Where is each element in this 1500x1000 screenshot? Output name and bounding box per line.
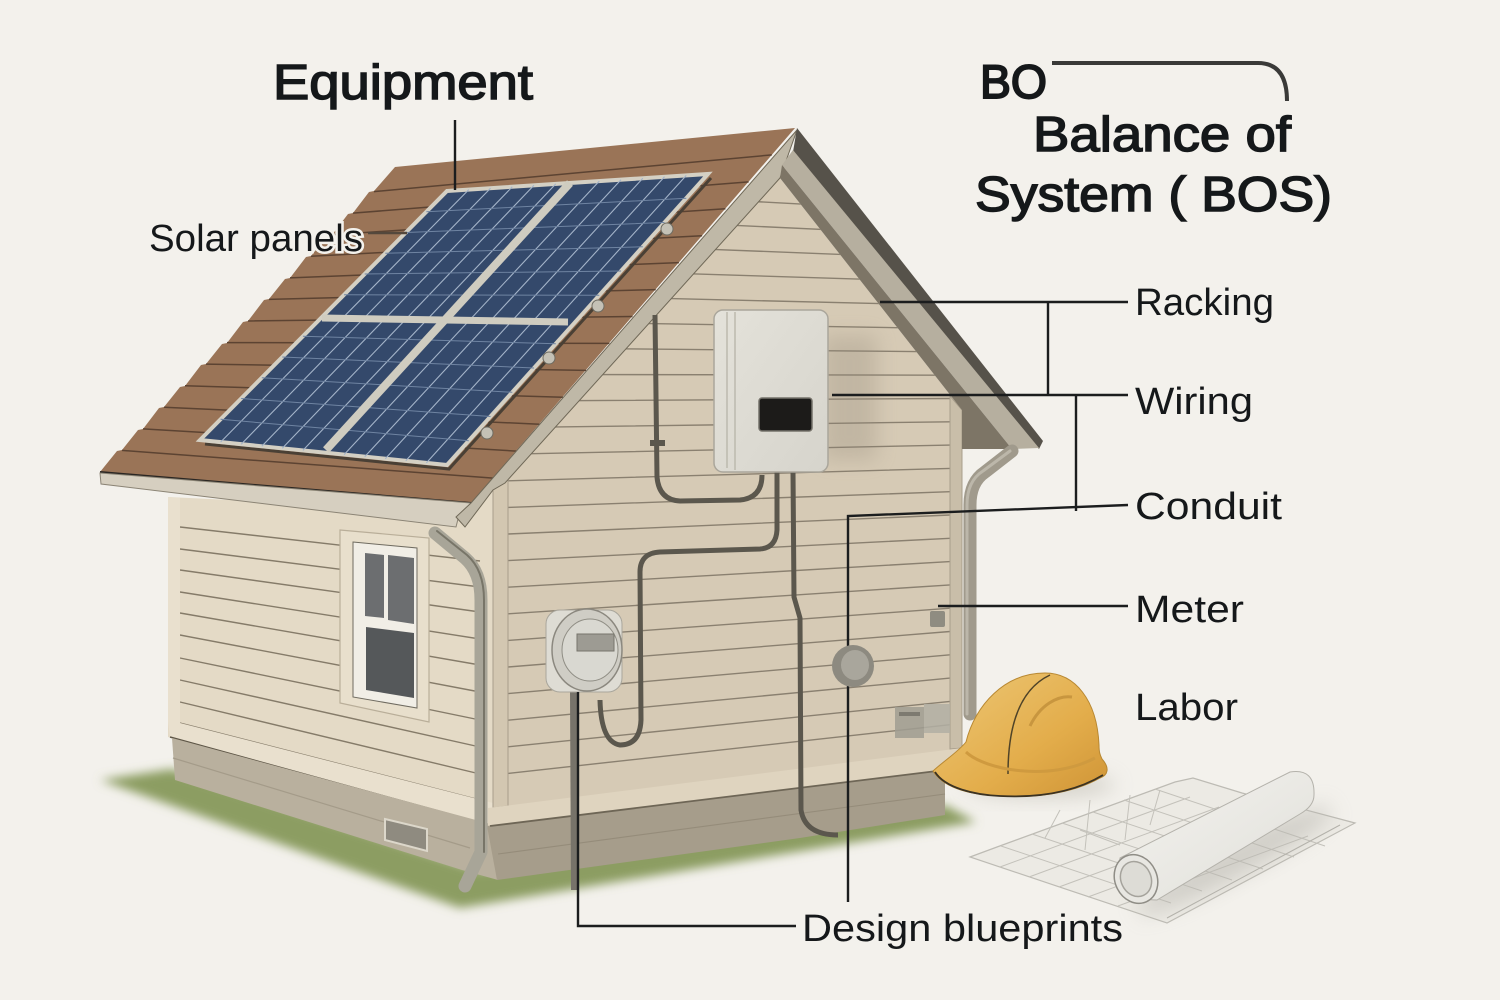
inverter display <box>759 398 812 431</box>
label: Design blueprints: Design blueprints <box>802 908 1123 950</box>
blueprint roll <box>970 771 1355 926</box>
label: Meter: Meter <box>1135 589 1244 631</box>
conduit pipes <box>574 315 838 890</box>
gable trim <box>456 128 1043 527</box>
rolled paper <box>1119 771 1314 900</box>
heading: Balance of System <box>975 108 1332 222</box>
leader lines <box>368 120 1128 926</box>
small meter box <box>930 611 945 627</box>
panel mounting brackets <box>481 223 673 439</box>
gable foundation <box>487 770 945 880</box>
roof <box>100 128 795 503</box>
roof fascia and eave <box>100 473 479 527</box>
upper window panes <box>365 553 414 624</box>
right rake board <box>782 150 1039 449</box>
window <box>340 530 429 722</box>
label: Conduit: Conduit <box>1135 486 1282 528</box>
utility meter <box>546 609 622 692</box>
left rake board <box>456 130 797 527</box>
heading: BO fragment with bracket: BO <box>980 55 1047 108</box>
inverter <box>714 310 828 472</box>
right gutter and downspout <box>967 451 1012 714</box>
lower window pane <box>366 627 414 698</box>
left foundation <box>172 738 498 880</box>
solar panels <box>200 174 711 469</box>
junction disconnect <box>832 645 874 687</box>
left wall <box>168 480 493 828</box>
label: Racking: Racking <box>1135 282 1274 324</box>
grass ground <box>100 769 976 908</box>
label: Labor: Labor <box>1135 687 1238 729</box>
hard hat <box>933 673 1115 797</box>
label: Solar panels: Solar panels <box>149 218 363 260</box>
heading: Balance of System: Balance of <box>1033 108 1291 162</box>
blueprint sheet <box>970 778 1355 923</box>
outlet boxes <box>895 704 950 738</box>
heading: BO fragment with bracket <box>980 55 1287 108</box>
heading: Balance of System: System ( BOS) <box>975 168 1332 222</box>
crawlspace vent <box>385 819 427 851</box>
gable wall <box>488 178 962 826</box>
right soffit <box>780 165 1012 449</box>
house <box>100 128 1043 886</box>
label: Wiring: Wiring <box>1135 381 1253 423</box>
left downspout <box>435 531 484 886</box>
right roof edge <box>793 128 1043 449</box>
heading: Equipment: Equipment <box>273 56 533 110</box>
